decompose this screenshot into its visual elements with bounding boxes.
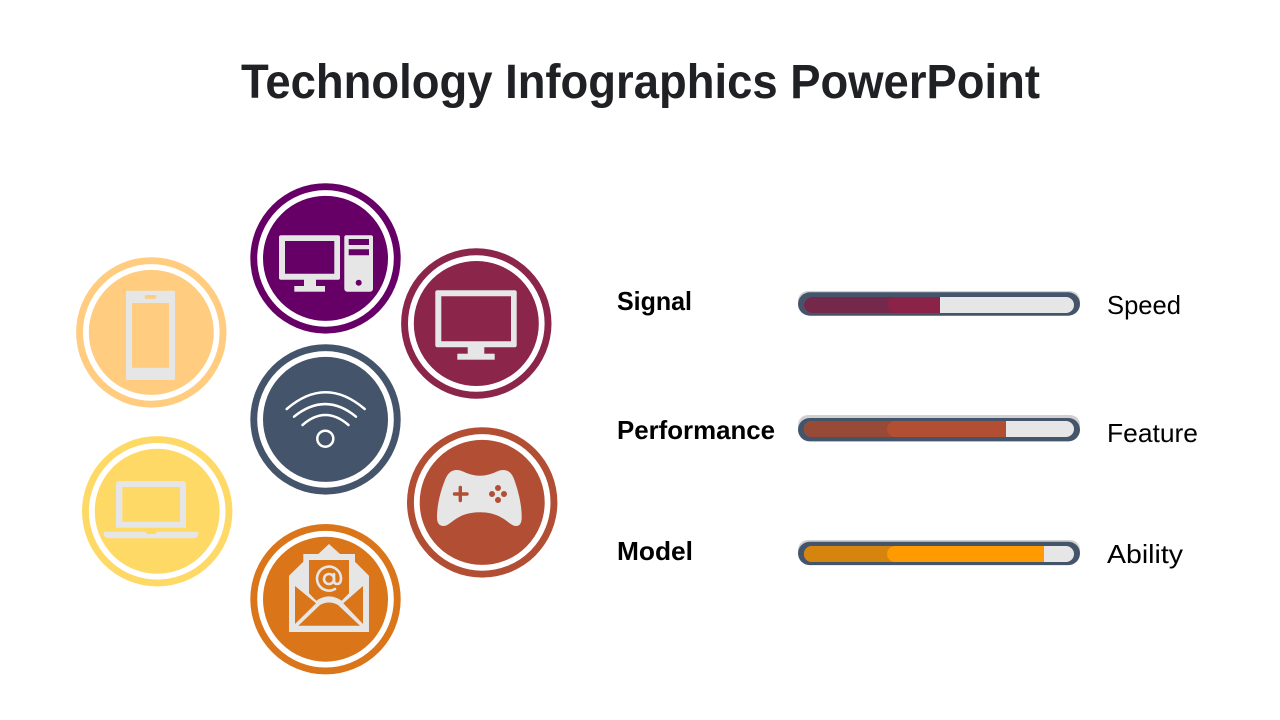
icon: desktop computer badge [250,183,401,334]
bar: Performance / Feature [798,415,1080,441]
label: Model: Model [617,536,693,566]
bar: Signal / Speed [798,291,1080,316]
label: Ability: Ability [1107,539,1183,569]
label: Signal: Signal [617,286,692,316]
label: Speed: Speed [1107,290,1181,320]
icon: laptop badge [82,436,232,586]
icon: monitor badge [401,248,552,399]
label: Feature: Feature [1107,418,1198,448]
title: Technology Infographics PowerPoint [241,56,1040,109]
icon: wifi badge [250,344,401,495]
icon: game controller badge [407,427,557,578]
icon: smartphone badge [76,257,226,408]
icon: email envelope badge [250,524,401,674]
label: Performance: Performance [617,415,775,445]
bar: Model / Ability [798,540,1080,565]
